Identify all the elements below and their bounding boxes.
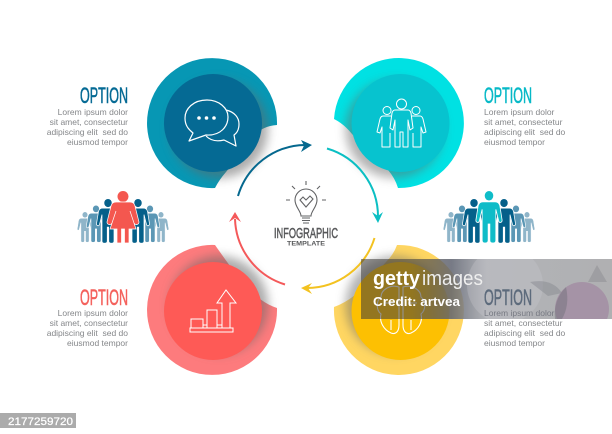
text block: top right: eiusmod tempor bbox=[484, 137, 545, 147]
text block: top left: adipiscing elit sed do bbox=[47, 127, 128, 137]
text block: bottom right: sit amet, consectetur bbox=[484, 318, 563, 328]
text block: bottom left: adipiscing elit sed do bbox=[47, 328, 128, 338]
icon: right people group bbox=[443, 191, 535, 243]
subtitle: template: TEMPLATE bbox=[287, 242, 325, 248]
title: infographic: INFOGRAPHIC bbox=[274, 225, 338, 242]
text block: top right: Lorem ipsum dolor bbox=[484, 107, 555, 117]
id tag: 2177259720 bbox=[8, 416, 73, 428]
text block: bottom left: eiusmod tempor bbox=[67, 338, 128, 348]
icon: left people group bbox=[77, 191, 169, 243]
heading: option bottom right: OPTION bbox=[484, 285, 532, 310]
text block: bottom right: eiusmod tempor bbox=[484, 338, 545, 348]
text block: top left: eiusmod tempor bbox=[67, 137, 128, 147]
panel: option 4 yellow circle bbox=[334, 245, 464, 375]
text block: top right: sit amet, consectetur bbox=[484, 117, 563, 127]
text block: top right: adipiscing elit sed do bbox=[484, 127, 566, 137]
text block: bottom right: adipiscing elit sed do bbox=[484, 328, 566, 338]
icon: brain outline bbox=[377, 286, 425, 334]
arrow: teal cycle arrow bbox=[327, 148, 383, 223]
text block: top left: Lorem ipsum dolor bbox=[58, 107, 128, 117]
text block: top left: sit amet, consectetur bbox=[50, 117, 128, 127]
icon: growth chart arrow bbox=[190, 290, 236, 332]
heading: option top left: OPTION bbox=[80, 83, 128, 108]
icon: speech bubbles bbox=[185, 100, 239, 146]
arrow: yellow cycle arrow bbox=[301, 238, 374, 294]
panel: option 2 cyan circle bbox=[334, 58, 464, 188]
watermark: getty images band: images bbox=[422, 268, 483, 290]
id tag bbox=[0, 413, 76, 428]
panel: option 1 blue circle bbox=[147, 58, 277, 188]
watermark: getty images band bbox=[361, 259, 612, 319]
watermark: getty images band: getty bbox=[373, 268, 421, 290]
watermark: getty images band: Credit: artvea bbox=[373, 295, 461, 309]
text block: bottom left: Lorem ipsum dolor bbox=[58, 308, 128, 318]
icon: three people outline bbox=[377, 99, 426, 147]
arrow: blue cycle arrow bbox=[238, 140, 312, 196]
arrow: red cycle arrow bbox=[229, 212, 285, 284]
panel: option 3 red circle bbox=[147, 245, 277, 375]
text block: bottom right: Lorem ipsum dolor bbox=[484, 308, 555, 318]
icon: light bulb with check bbox=[286, 181, 326, 223]
text block: bottom left: sit amet, consectetur bbox=[50, 318, 128, 328]
heading: option bottom left: OPTION bbox=[80, 285, 128, 310]
heading: option top right: OPTION bbox=[484, 83, 532, 108]
